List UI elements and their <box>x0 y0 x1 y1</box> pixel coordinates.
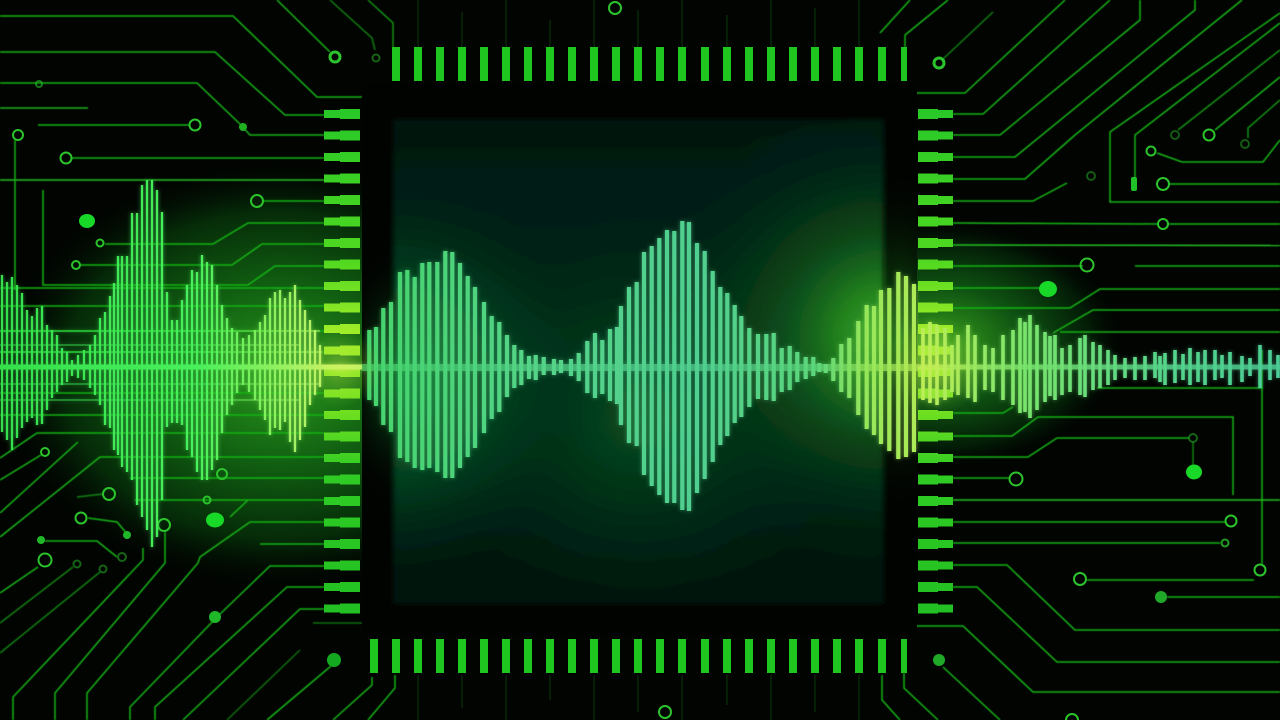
circuit traces: right <box>880 0 1280 720</box>
chip screen <box>393 119 884 604</box>
bottom pins <box>370 639 907 673</box>
circuit traces: left <box>0 0 395 720</box>
waveform: centre of chip <box>362 221 918 511</box>
hot spot glow over left pins <box>300 327 380 407</box>
left pins <box>324 109 360 614</box>
background glow: right <box>750 210 1170 490</box>
hot spot glow over right pins <box>885 315 985 415</box>
chip body <box>362 83 917 636</box>
right pins <box>918 109 953 614</box>
solid contact dots <box>37 123 1202 667</box>
top pins <box>392 47 907 81</box>
circuit traces: top and bottom <box>418 0 859 720</box>
chip left strip glow <box>362 230 394 520</box>
chip right strip glow <box>884 170 917 510</box>
waveform: right of chip <box>918 315 1280 418</box>
background glow: left <box>0 150 400 630</box>
waveform: left of chip <box>0 180 362 547</box>
